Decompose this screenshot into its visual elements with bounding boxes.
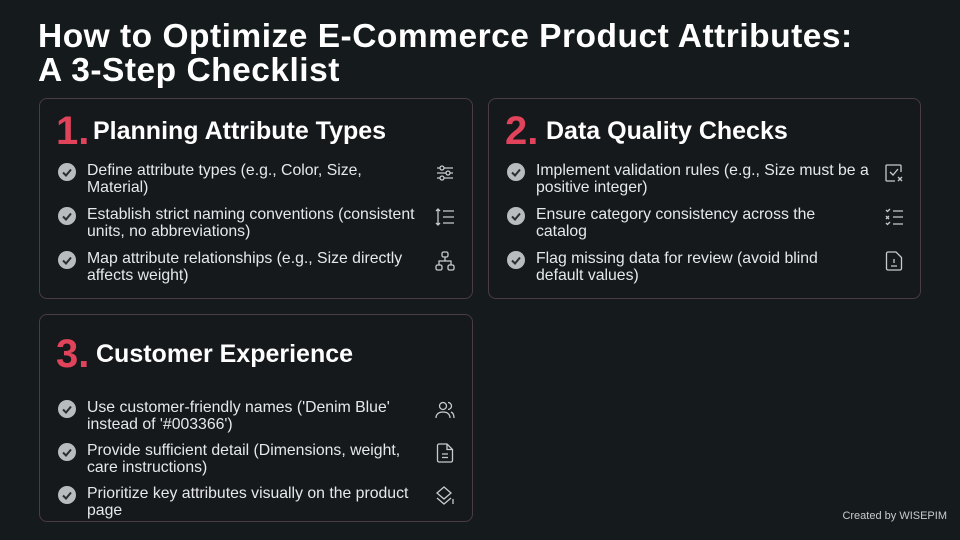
item 1.2: Establish strict naming conventions (consistent	[87, 206, 414, 223]
item 3.2: Provide sufficient detail (Dimensions, weight,	[87, 442, 400, 459]
item 3.3	[58, 485, 454, 519]
panel: data quality checks	[488, 98, 921, 299]
heading 2: Data Quality Checks	[546, 117, 788, 145]
item 3.1	[58, 399, 455, 433]
icon: document	[436, 443, 454, 463]
item 1.3	[58, 250, 455, 284]
item 2.2: Ensure category consistency across the	[536, 206, 815, 223]
item 1.1	[58, 162, 453, 196]
heading 1: Planning Attribute Types	[93, 117, 386, 145]
icon: file alert	[886, 251, 902, 271]
panel: planning attribute types	[39, 98, 473, 299]
item 2.3: default values)	[536, 267, 639, 284]
icon: check box	[885, 164, 902, 182]
item 1.1: Define attribute types (e.g., Color, Size,	[87, 162, 362, 179]
item 2.1: Implement validation rules (e.g., Size must be a	[536, 162, 869, 179]
item 1.2: units, no abbreviations)	[87, 223, 250, 240]
heading 3: Customer Experience	[96, 340, 353, 368]
item 3.3: Prioritize key attributes visually on the product	[87, 485, 408, 502]
number 3: 3.	[56, 332, 89, 376]
item 2.1: positive integer)	[536, 179, 648, 196]
item 3.1: instead of '#003366')	[87, 416, 233, 433]
title	[38, 18, 853, 89]
item 1.3: affects weight)	[87, 267, 189, 284]
icon: users	[435, 402, 455, 418]
item 1.2	[58, 206, 454, 240]
icon: sliders	[437, 165, 453, 181]
item 3.2: care instructions)	[87, 459, 207, 476]
item 3.1: Use customer-friendly names ('Denim Blue'	[87, 399, 390, 416]
item 2.2: catalog	[536, 223, 587, 240]
title: How to Optimize E-Commerce Product Attributes:	[38, 18, 853, 55]
footer credit: Created by WISEPIM	[842, 510, 947, 522]
number 1: 1.	[56, 109, 89, 153]
item 1.1: Material)	[87, 179, 148, 196]
icon: hierarchy	[435, 251, 455, 271]
panel: customer experience	[39, 314, 473, 522]
item 3.3: page	[87, 502, 122, 519]
icon: sort list	[436, 208, 454, 226]
number 2: 2.	[505, 109, 538, 153]
icon: layers	[436, 486, 454, 505]
item 2.3: Flag missing data for review (avoid blind	[536, 250, 818, 267]
icon: checklist	[886, 208, 903, 226]
item 1.3: Map attribute relationships (e.g., Size directly	[87, 250, 402, 267]
item 3.2	[58, 442, 454, 476]
item 2.2	[507, 206, 903, 240]
item 2.3	[507, 250, 902, 284]
title: A 3-Step Checklist	[38, 52, 340, 89]
item 2.1	[507, 162, 902, 196]
